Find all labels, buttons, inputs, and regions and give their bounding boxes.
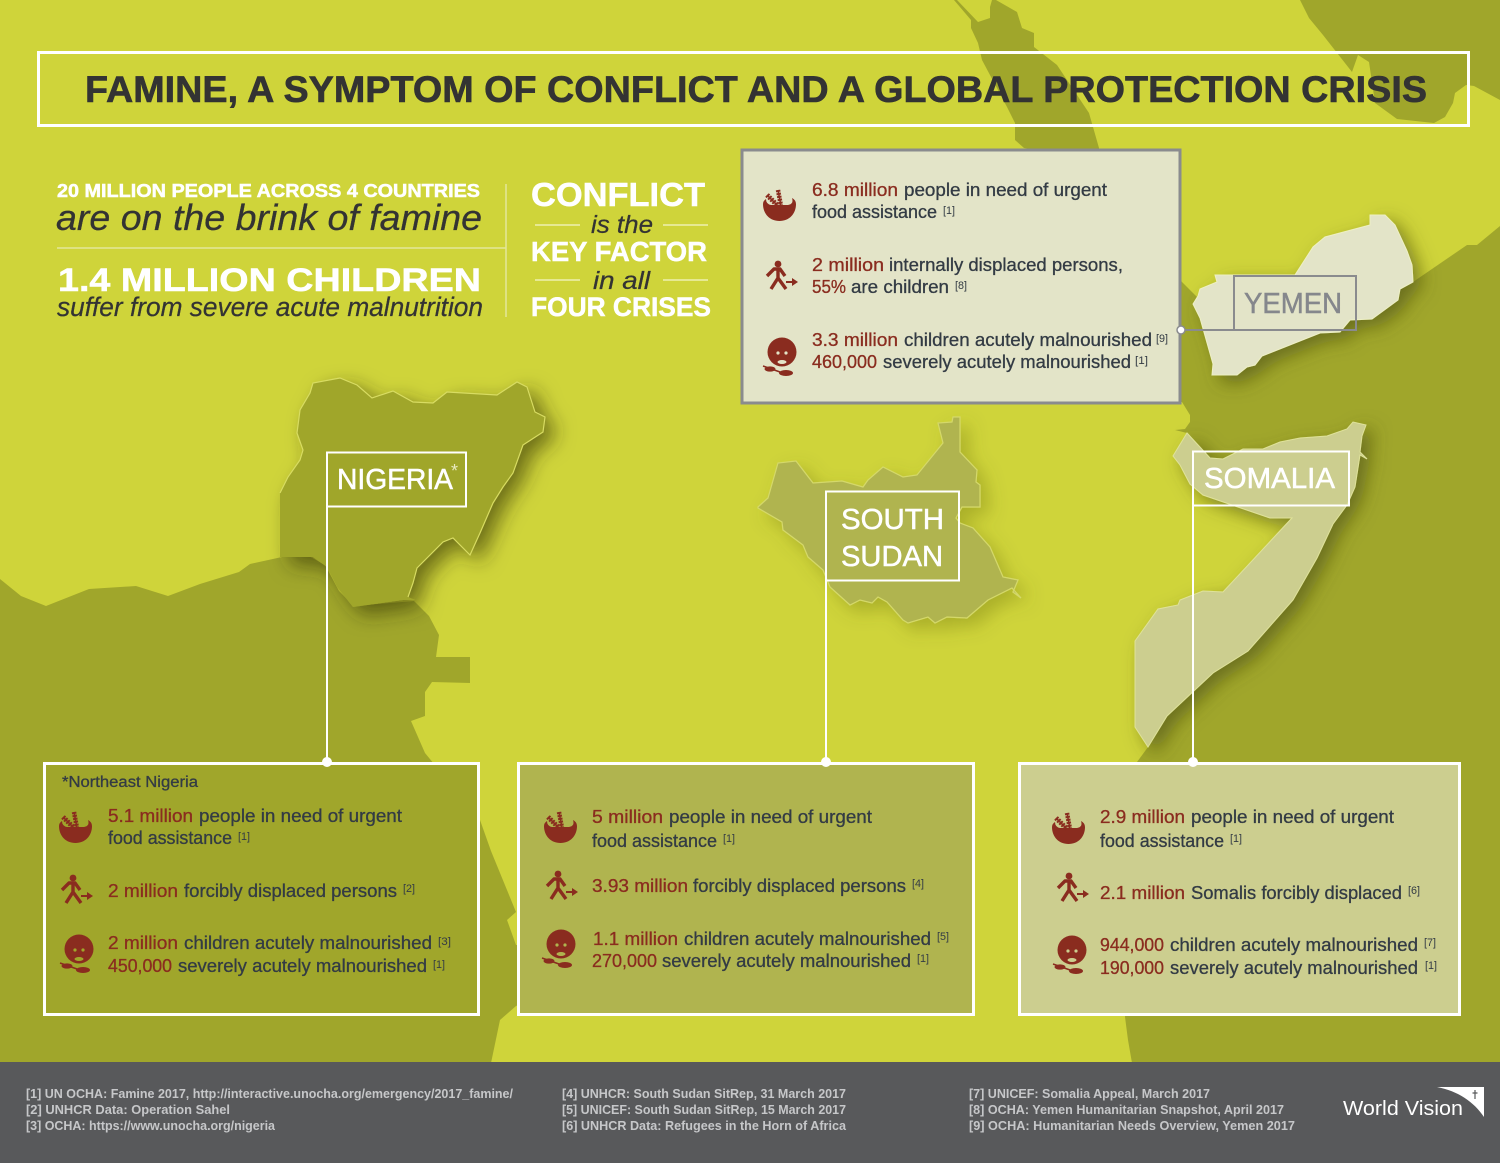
stat: displaced — [592, 876, 924, 896]
stat: malnourished: severely acutely malnourished — [1170, 958, 1418, 978]
icon: person walking — [1058, 873, 1089, 901]
stat: malnourished — [108, 933, 451, 976]
label: Nigeria: NIGERIA — [337, 464, 454, 496]
label: South Sudan — [826, 492, 959, 762]
stat: food assistance: 6.8 million — [812, 180, 898, 200]
stat: malnourished: [1] — [917, 953, 929, 965]
stat: displaced: 3.93 million — [592, 876, 688, 896]
headline: 1.4 million children: suffer from severe acute malnutrition — [57, 292, 483, 322]
icon: bowl — [59, 812, 92, 843]
stat: malnourished: severely acutely malnourished — [883, 352, 1131, 372]
headline: 1.4 million children: 1.4 MILLION CHILDREN — [58, 262, 481, 298]
stat: food assistance — [108, 806, 402, 848]
stat: malnourished: children acutely malnourished — [904, 330, 1152, 350]
stat: malnourished: children acutely malnourished — [684, 929, 931, 949]
stat: displaced: [4] — [912, 878, 924, 890]
stat: malnourished: [1] — [1425, 960, 1437, 972]
map: Somalia — [1135, 422, 1367, 747]
stat: food assistance: people in need of urgent — [199, 806, 402, 826]
sources: column 1: [3] OCHA: https://www.unocha.org/nigeria — [26, 1118, 276, 1133]
key factor statement: in all — [593, 267, 652, 295]
label: South Sudan: SUDAN — [841, 541, 943, 573]
stat: food assistance: 5 million — [592, 807, 663, 827]
sources: column 3: [7] UNICEF: Somalia Appeal, March 2017 — [969, 1086, 1210, 1101]
label: Somalia: SOMALIA — [1204, 463, 1336, 495]
stat: malnourished — [1100, 935, 1437, 978]
panel: South Sudan — [518, 764, 974, 1014]
stat: food assistance: 5.1 million — [108, 806, 193, 826]
sources: column 1: [2] UNHCR Data: Operation Sahel — [26, 1102, 230, 1117]
label: Somalia — [1193, 452, 1349, 762]
connector dot: Nigeria — [322, 757, 332, 767]
stat: food assistance: people in need of urgent — [669, 807, 872, 827]
key factor statement: is the — [591, 211, 653, 239]
stat: food assistance: [1] — [238, 831, 250, 843]
stat: malnourished: 460,000 — [812, 352, 877, 372]
stat: malnourished: [9] — [1156, 333, 1168, 345]
headline: 20 million: are on the brink of famine — [56, 197, 482, 238]
stat: food assistance: [1] — [943, 205, 955, 217]
stat: food assistance: people in need of urgent — [1191, 807, 1394, 827]
icon: person walking — [767, 261, 798, 289]
stat: displaced: forcibly displaced persons — [693, 876, 906, 896]
stat: malnourished: 2 million — [108, 933, 178, 953]
map: Yemen — [1193, 215, 1413, 375]
note: Northeast Nigeria: *Northeast Nigeria — [62, 774, 198, 791]
panel: Nigeria — [44, 764, 478, 1014]
sources: column 2 — [562, 1086, 847, 1133]
stat: food assistance — [1100, 807, 1394, 851]
map: Red Sea strip — [954, 0, 1100, 160]
key factor statement: CONFLICT — [531, 176, 705, 213]
icon: child face — [763, 338, 796, 376]
panel: Yemen — [742, 150, 1180, 403]
key factor statement — [531, 176, 711, 322]
sources: column 3: [8] OCHA: Yemen Humanitarian Snapshot, April 2017 — [969, 1102, 1284, 1117]
sources: column 2: [4] UNHCR: South Sudan SitRep, 31 March 2017 — [562, 1086, 846, 1101]
stat: malnourished: children acutely malnourished — [184, 933, 432, 953]
stat: food assistance: food assistance — [108, 828, 232, 848]
stat: displaced: 2.1 million — [1100, 883, 1185, 903]
stat: malnourished — [812, 330, 1168, 372]
stat: food assistance: [1] — [723, 833, 735, 845]
stat: food assistance — [812, 180, 1107, 222]
map: Indian Ocean region — [1125, 226, 1500, 1063]
stat: displaced: [6] — [1408, 885, 1420, 897]
icon: person walking — [62, 875, 93, 903]
stat: malnourished — [592, 929, 949, 971]
map: South Sudan — [758, 417, 1021, 623]
stat: displaced — [1100, 883, 1420, 903]
connector dot: Yemen — [1177, 326, 1185, 334]
connector dot: Somalia — [1188, 757, 1198, 767]
icon: child face — [60, 934, 94, 973]
stat: food assistance: 2.9 million — [1100, 807, 1185, 827]
stat: food assistance: food assistance — [1100, 831, 1224, 851]
key factor statement: KEY FACTOR — [531, 236, 707, 267]
stat: malnourished: [7] — [1424, 937, 1436, 949]
logo: World Vision — [1343, 1087, 1484, 1120]
stat: displaced: [8] — [955, 280, 967, 292]
connector dot: South Sudan — [821, 757, 831, 767]
headline: 1.4 million children — [57, 262, 483, 322]
stat: food assistance: [1] — [1230, 833, 1242, 845]
sources: column 2: [6] UNHCR Data: Refugees in the Horn of Africa — [562, 1118, 847, 1133]
footer: sources and logo — [0, 1062, 1500, 1163]
label: Nigeria: * — [451, 461, 458, 481]
stat: malnourished: severely acutely malnourished — [662, 951, 911, 971]
key factor statement: FOUR CRISES — [531, 292, 711, 322]
icon: bowl — [544, 812, 577, 843]
map: west and central Africa landmass — [0, 555, 530, 1063]
stat: food assistance — [592, 807, 872, 851]
sources: column 2: [5] UNICEF: South Sudan SitRep, 15 March 2017 — [562, 1102, 846, 1117]
stat: malnourished: 1.1 million — [593, 929, 678, 949]
stat: displaced: internally displaced persons, — [889, 255, 1123, 275]
stat: food assistance: food assistance — [592, 831, 717, 851]
icon: bowl — [1052, 813, 1085, 844]
stat: malnourished: children acutely malnourished — [1170, 935, 1418, 955]
stat: malnourished: [1] — [433, 959, 445, 971]
stat: food assistance: people in need of urgent — [904, 180, 1107, 200]
stat: displaced: 55% — [812, 277, 846, 297]
stat: displaced — [108, 881, 415, 901]
icon: child face — [1053, 936, 1086, 974]
headline: 20 million: 20 MILLION PEOPLE ACROSS 4 COUNTRIES — [57, 181, 480, 201]
icon: person walking — [547, 871, 578, 899]
stat: food assistance: food assistance — [812, 202, 937, 222]
stat: displaced — [812, 255, 1123, 297]
stat: malnourished: 450,000 — [108, 956, 172, 976]
stat: malnourished: [1] — [1135, 355, 1148, 367]
sources: column 1 — [26, 1086, 513, 1133]
stat: malnourished: severely acutely malnourished — [178, 956, 427, 976]
stat: malnourished: 270,000 — [592, 951, 657, 971]
label: Nigeria — [327, 452, 466, 762]
headline statistics — [56, 181, 506, 322]
stat: displaced: are children — [851, 277, 949, 297]
stat: malnourished: 3.3 million — [812, 330, 898, 350]
label: Yemen: YEMEN — [1244, 288, 1342, 320]
stat: malnourished: [5] — [937, 931, 949, 943]
title — [38, 52, 1468, 126]
logo: World Vision: World Vision — [1343, 1098, 1463, 1120]
stat: displaced: forcibly displaced persons — [184, 881, 397, 901]
stat: displaced: 2 million — [812, 255, 884, 275]
stat: displaced: [2] — [403, 883, 415, 895]
stat: displaced: Somalis forcibly displaced — [1191, 883, 1402, 903]
sources: column 3: [9] OCHA: Humanitarian Needs Overview, Yemen 2017 — [969, 1118, 1295, 1133]
label: South Sudan: SOUTH — [841, 504, 944, 536]
stat: malnourished: 944,000 — [1100, 935, 1164, 955]
sources: column 1: [1] UN OCHA: Famine 2017, http://interactive.unocha.org/emergency/2017_famine/ — [26, 1086, 513, 1101]
title: FAMINE, A SYMPTOM OF CONFLICT AND A GLOBAL PROTECTION CRISIS — [85, 69, 1427, 110]
stat: displaced: 2 million — [108, 881, 178, 901]
headline: 20 million — [56, 181, 482, 238]
sources: column 3 — [969, 1086, 1295, 1133]
map: Nigeria — [280, 378, 545, 607]
map: Persian Gulf region — [1300, 0, 1500, 123]
panel: Somalia — [1020, 764, 1460, 1014]
stat: malnourished: 190,000 — [1100, 958, 1164, 978]
icon: child face — [542, 930, 576, 968]
stat: malnourished: [3] — [438, 936, 451, 948]
label: Yemen — [1181, 276, 1356, 330]
icon: bowl — [763, 190, 796, 221]
